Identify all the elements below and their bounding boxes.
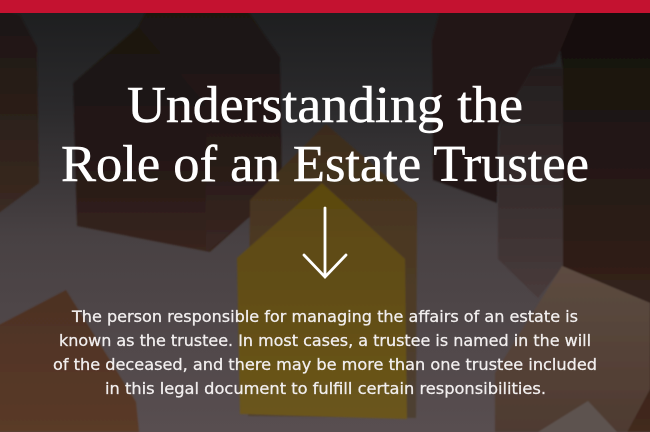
house: yellow front face bbox=[237, 183, 407, 419]
icon: down arrow bbox=[304, 208, 346, 277]
house: lower right tan block bbox=[495, 266, 650, 432]
house: dark block roof face bbox=[138, 10, 282, 252]
description paragraph: The person responsible for managing the affairs of an estate is bbox=[71, 307, 578, 326]
description paragraph: of the deceased, and there may be more than one trustee included bbox=[53, 355, 597, 374]
house: large dark block bbox=[73, 10, 282, 252]
description paragraph: known as the trustee. In most cases, a trustee is named in the will bbox=[59, 331, 591, 350]
house: back of yellow block bbox=[248, 124, 417, 418]
house: upper right block bbox=[432, 10, 577, 203]
title bbox=[61, 77, 589, 193]
house: far left dark block bbox=[0, 8, 39, 216]
house: light column right bbox=[498, 68, 563, 298]
title: Understanding the bbox=[127, 77, 523, 134]
description paragraph bbox=[53, 307, 597, 398]
house: right upper dark mass bbox=[555, 10, 650, 432]
description paragraph: in this legal document to fulfill certain responsibilities. bbox=[105, 379, 546, 398]
title: Role of an Estate Trustee bbox=[61, 136, 589, 193]
top red bar bbox=[0, 0, 650, 13]
house: bottom right grey block bbox=[538, 401, 617, 432]
house: lower left wood block bbox=[0, 290, 139, 432]
